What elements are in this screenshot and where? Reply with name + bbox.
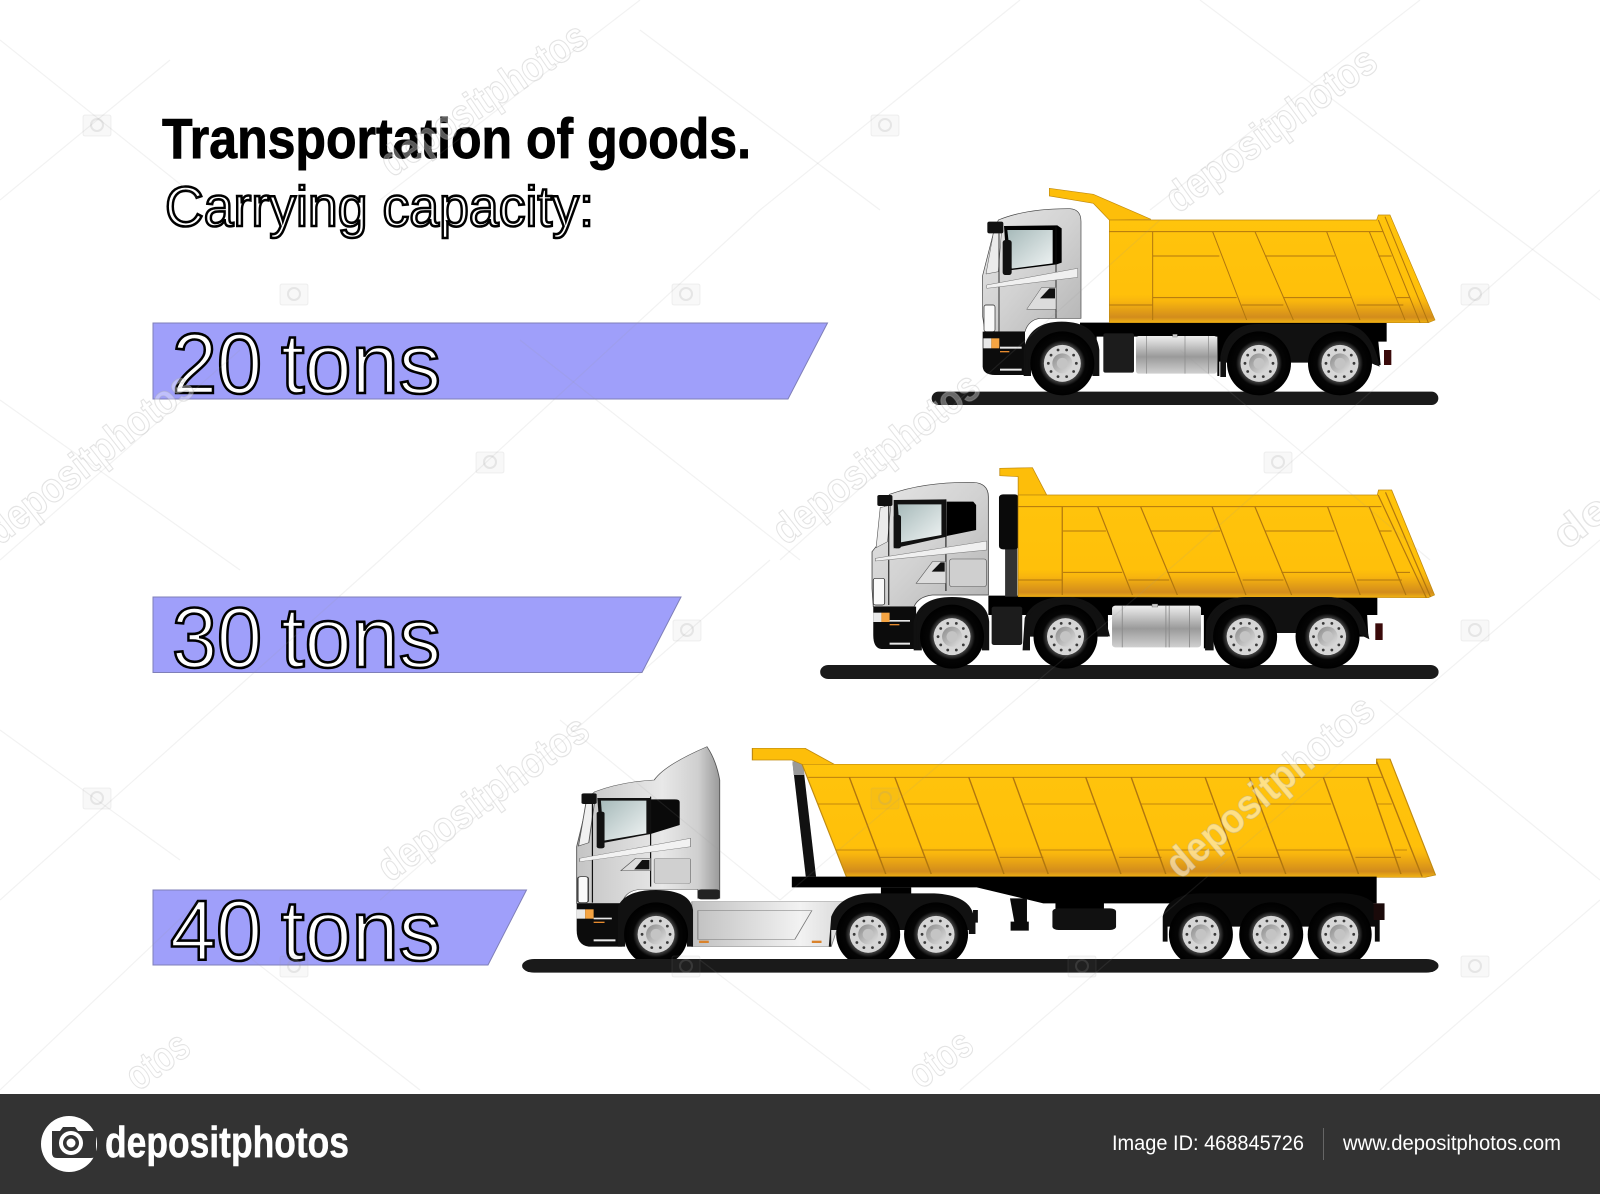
- watermark overlay: depositphotos: [1156, 36, 1386, 221]
- capacity label: 40 tons: tons: [281, 884, 441, 979]
- tractor rear frame: [829, 893, 978, 947]
- air intake: [999, 494, 1019, 597]
- capacity label: 30 tons: 30: [172, 591, 262, 686]
- wheel arches: [915, 598, 1367, 649]
- watermark overlay: depositphotos: [763, 362, 989, 553]
- watermark overlay: depositphotos: [1156, 685, 1383, 887]
- fuel tank: [1136, 334, 1217, 374]
- capacity label: 20 tons: 20: [172, 317, 262, 412]
- wheels: [624, 902, 1372, 966]
- truck: 40 ton tractor with tipper semi-trailer: [522, 747, 1438, 973]
- watermark overlay: otos: [116, 1021, 198, 1099]
- tail light: [1374, 903, 1385, 920]
- watermark overlay: otos: [899, 1019, 981, 1097]
- tail light: [1375, 623, 1383, 640]
- bumper and headlight: [983, 332, 1025, 375]
- website: www.depositphotos.com: [1342, 1132, 1561, 1155]
- watermark overlay: depositphotos: [368, 705, 598, 890]
- chassis: [1080, 323, 1387, 376]
- dump body: [1049, 188, 1435, 323]
- capacity label: 30 tons: [153, 591, 681, 686]
- bumper and headlight: [873, 607, 916, 649]
- wheels: [920, 605, 1360, 669]
- capacity label: 30 tons: tons: [281, 591, 441, 686]
- image id: Image ID: 468845726: [1112, 1132, 1304, 1155]
- spare wheel: [1052, 900, 1116, 930]
- footer bar: [0, 1094, 1600, 1194]
- title: Transportation of goods.: [162, 107, 751, 171]
- tail light: [1384, 350, 1391, 365]
- dump body: [752, 748, 1435, 877]
- subtitle: Carrying capacity:: [165, 175, 594, 239]
- battery box: [1103, 333, 1134, 373]
- footer logo icon: camera: [41, 1116, 97, 1172]
- chassis: [988, 596, 1377, 648]
- truck: 30 ton three-axle-plus dump truck: [820, 468, 1439, 679]
- capacity label: 20 tons: tons: [281, 317, 441, 412]
- cab arch: [618, 890, 693, 947]
- ground bar 30 tons: [820, 665, 1439, 679]
- cab: [577, 747, 720, 903]
- capacity label: 40 tons: 40: [170, 884, 262, 979]
- footer wordmark: depositphotos: [105, 1118, 349, 1167]
- hydraulic ram: [792, 762, 816, 877]
- ground bar 20 tons: [932, 392, 1438, 405]
- truck: 20 ton two-rear-axle dump truck: [932, 188, 1438, 405]
- wheel arches: [1025, 323, 1378, 376]
- side skirt: [692, 902, 846, 947]
- cab: [872, 482, 988, 607]
- trailer axle fender: [1163, 893, 1380, 942]
- trailer chassis: [792, 877, 1377, 903]
- ground bar 40 tons: [522, 959, 1438, 973]
- capacity label: 20 tons: [153, 317, 828, 412]
- wheels: [1030, 331, 1372, 395]
- landing gear: [1010, 898, 1029, 931]
- battery box: [992, 607, 1022, 645]
- dump body: [1000, 468, 1434, 598]
- bumper and headlight: [577, 903, 622, 947]
- cab: [982, 209, 1081, 332]
- fuel tank: [1112, 604, 1201, 647]
- capacity label: 40 tons: [153, 884, 526, 979]
